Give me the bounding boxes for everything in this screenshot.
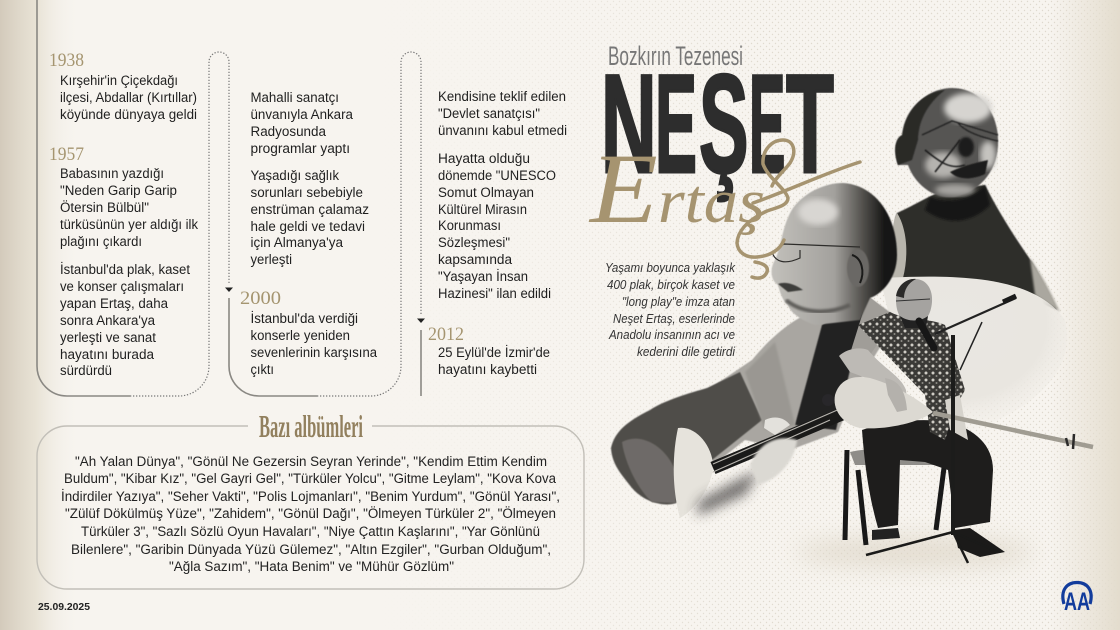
arrow: second connector: [417, 318, 425, 323]
text Istanbul and Ankara: sonra Ankara'ya: [60, 313, 155, 328]
timeline column 3: [428, 89, 567, 377]
photo: upper portrait: [888, 88, 1060, 312]
year 1957: 1957: [49, 144, 84, 165]
text state artist: [438, 89, 567, 138]
photo: saz bowl behind: [880, 277, 1067, 432]
timeline column 2: [240, 90, 377, 377]
heading: script surname: Ertaş: [588, 133, 765, 244]
text 2012: [438, 345, 550, 377]
text Istanbul and Ankara: yapan Ertaş, daha: [60, 296, 168, 311]
text 1938: ilçesi, Abdallar (Kırtıllar): [60, 90, 197, 105]
text 1938: [60, 73, 197, 122]
text health and Germany: yerleşti: [250, 252, 292, 267]
text Ankara Radio: Mahalli sanatçı: [250, 90, 339, 105]
text state artist: Kendisine teklif edilen: [438, 89, 566, 104]
text health and Germany: [250, 168, 369, 267]
text UNESCO: Hazinesi" ilan edildi: [438, 286, 551, 301]
text UNESCO: "Yaşayan İnsan: [438, 269, 528, 284]
heading: script surname: [588, 133, 860, 278]
text 2000: çıktı: [250, 362, 274, 377]
intro text: 400 plak, birçok kaset ve: [607, 277, 735, 292]
heading: name: E: [655, 47, 697, 203]
text UNESCO: dönemde "UNESCO: [438, 168, 556, 183]
intro text: kederini dile getirdi: [637, 344, 736, 359]
text health and Germany: enstrüman çalamaz: [250, 202, 369, 217]
text Istanbul and Ankara: İstanbul'da plak, kaset: [60, 262, 190, 277]
albums list: "Zülüf Dökülmüş Yüze", "Zahidem", "Gönül Dağı", "Ölmeyen Türküler 2", "Ölmeyen: [65, 506, 556, 521]
text state artist: ünvanını kabul etmedi: [438, 123, 567, 138]
script flourish: [737, 140, 860, 278]
microphone stand: [866, 296, 1016, 563]
text Istanbul and Ankara: ve konser çalışmaları: [60, 279, 184, 294]
text UNESCO: Sözleşmesi": [438, 235, 510, 250]
text health and Germany: için Almanya'ya: [250, 235, 343, 250]
text 2000: sevenlerinin karşısına: [250, 345, 377, 360]
text 1957: "Neden Garip Garip: [60, 183, 177, 198]
text 2012: 25 Eylül'de İzmir'de: [438, 345, 550, 360]
albums list: Buldum", "Kibar Kız", "Gel Gayri Gel", "Türküler Yolcu", "Gitme Leylam", "Kova Kova: [64, 471, 556, 486]
photo: seated musician with saz: [835, 279, 1093, 563]
albums heading: Bazı albümleri: [259, 408, 363, 444]
text Istanbul and Ankara: [60, 262, 190, 378]
text UNESCO: Kültürel Mirasın: [438, 202, 527, 217]
heading: name: E: [749, 46, 785, 202]
text health and Germany: sorunları sebebiyle: [250, 185, 363, 200]
photo: main portrait: [611, 183, 898, 518]
text Ankara Radio: programlar yaptı: [250, 141, 350, 156]
albums list: "Ah Yalan Dünya", "Gönül Ne Gezersin Seyran Yerinde", "Kendim Ettim Kendim: [75, 454, 547, 469]
text state artist: "Devlet sanatçısı": [438, 106, 540, 121]
text 1938: Kırşehir'in Çiçekdağı: [60, 73, 178, 88]
text Ankara Radio: [250, 90, 353, 156]
albums list: "Ağla Sazım", "Hata Benim" ve "Mühür Gözlüm": [169, 559, 454, 574]
albums list: Türküler 3", "Sazlı Sözlü Oyun Havaları", "Niye Çattın Kaşlarını", "Yar Gönlünü: [81, 524, 540, 539]
heading: subtitle: Bozkırın Tezenesi: [608, 41, 743, 71]
albums list: Bilenlere", "Garibin Dünyada Yüzü Gülemez", "Altın Ezgiler", "Gurban Olduğum",: [71, 542, 551, 557]
heading: name: Ş: [699, 46, 748, 202]
text 1957: Ötersin Bülbül": [60, 200, 149, 215]
heading: name: N: [601, 46, 657, 202]
text 2012: hayatını kaybetti: [438, 362, 537, 377]
text health and Germany: hale geldi ve tedavi: [250, 219, 365, 234]
text 1957: [60, 166, 198, 249]
text 2000: İstanbul'da verdiği: [250, 311, 358, 326]
year 2000: 2000: [240, 288, 281, 309]
photo collage: floor shadow: [795, 536, 1035, 568]
intro text: Anadolu insanının acı ve: [608, 327, 735, 342]
intro text: Yaşamı boyunca yaklaşık: [605, 260, 736, 275]
text UNESCO: Somut Olmayan: [438, 185, 534, 200]
text 1957: türküsünün yer aldığı ilk: [60, 217, 198, 232]
text 1938: köyünde dünyaya geldi: [60, 107, 197, 122]
panel: albums: [37, 408, 584, 589]
timeline frame connector: [37, 0, 421, 396]
heading: name: [601, 46, 834, 203]
timeline column 1: [49, 50, 198, 378]
icon: AA logo: [1063, 582, 1091, 616]
text Istanbul and Ankara: sürdürdü: [60, 363, 112, 378]
intro text: "long play"e imza atan: [622, 294, 735, 309]
albums list: [61, 454, 560, 574]
year 1938: 1938: [49, 50, 84, 71]
text Ankara Radio: Radyosunda: [250, 124, 326, 139]
text UNESCO: Hayatta olduğu: [438, 151, 530, 166]
albums list: İndirdiler Yazıya", "Seher Vakti", "Polis Lojmanları", "Benim Yurdum", "Gönül Yarası",: [61, 489, 560, 504]
icon: AA logo: AA: [1064, 588, 1090, 616]
text health and Germany: Yaşadığı sağlık: [250, 168, 339, 183]
text UNESCO: kapsamında: [438, 252, 512, 267]
text Ankara Radio: ünvanıyla Ankara: [250, 107, 353, 122]
intro text: Neşet Ertaş, eserlerinde: [613, 311, 735, 326]
arrow: first connector: [225, 288, 233, 292]
text 1957: Babasının yazdığı: [60, 166, 164, 181]
text UNESCO: Korunması: [438, 218, 501, 233]
text Istanbul and Ankara: hayatını burada: [60, 347, 154, 362]
text 1957: plağını çıkardı: [60, 234, 142, 249]
intro text: [605, 260, 736, 359]
heading: name: T: [786, 46, 834, 203]
text UNESCO: [438, 151, 556, 301]
date: 25.09.2025: [38, 601, 90, 613]
text 2000: konserle yeniden: [250, 328, 350, 343]
text 2000: [250, 311, 377, 377]
text Istanbul and Ankara: yerleşti ve sanat: [60, 330, 156, 345]
year 2012: 2012: [428, 324, 464, 345]
